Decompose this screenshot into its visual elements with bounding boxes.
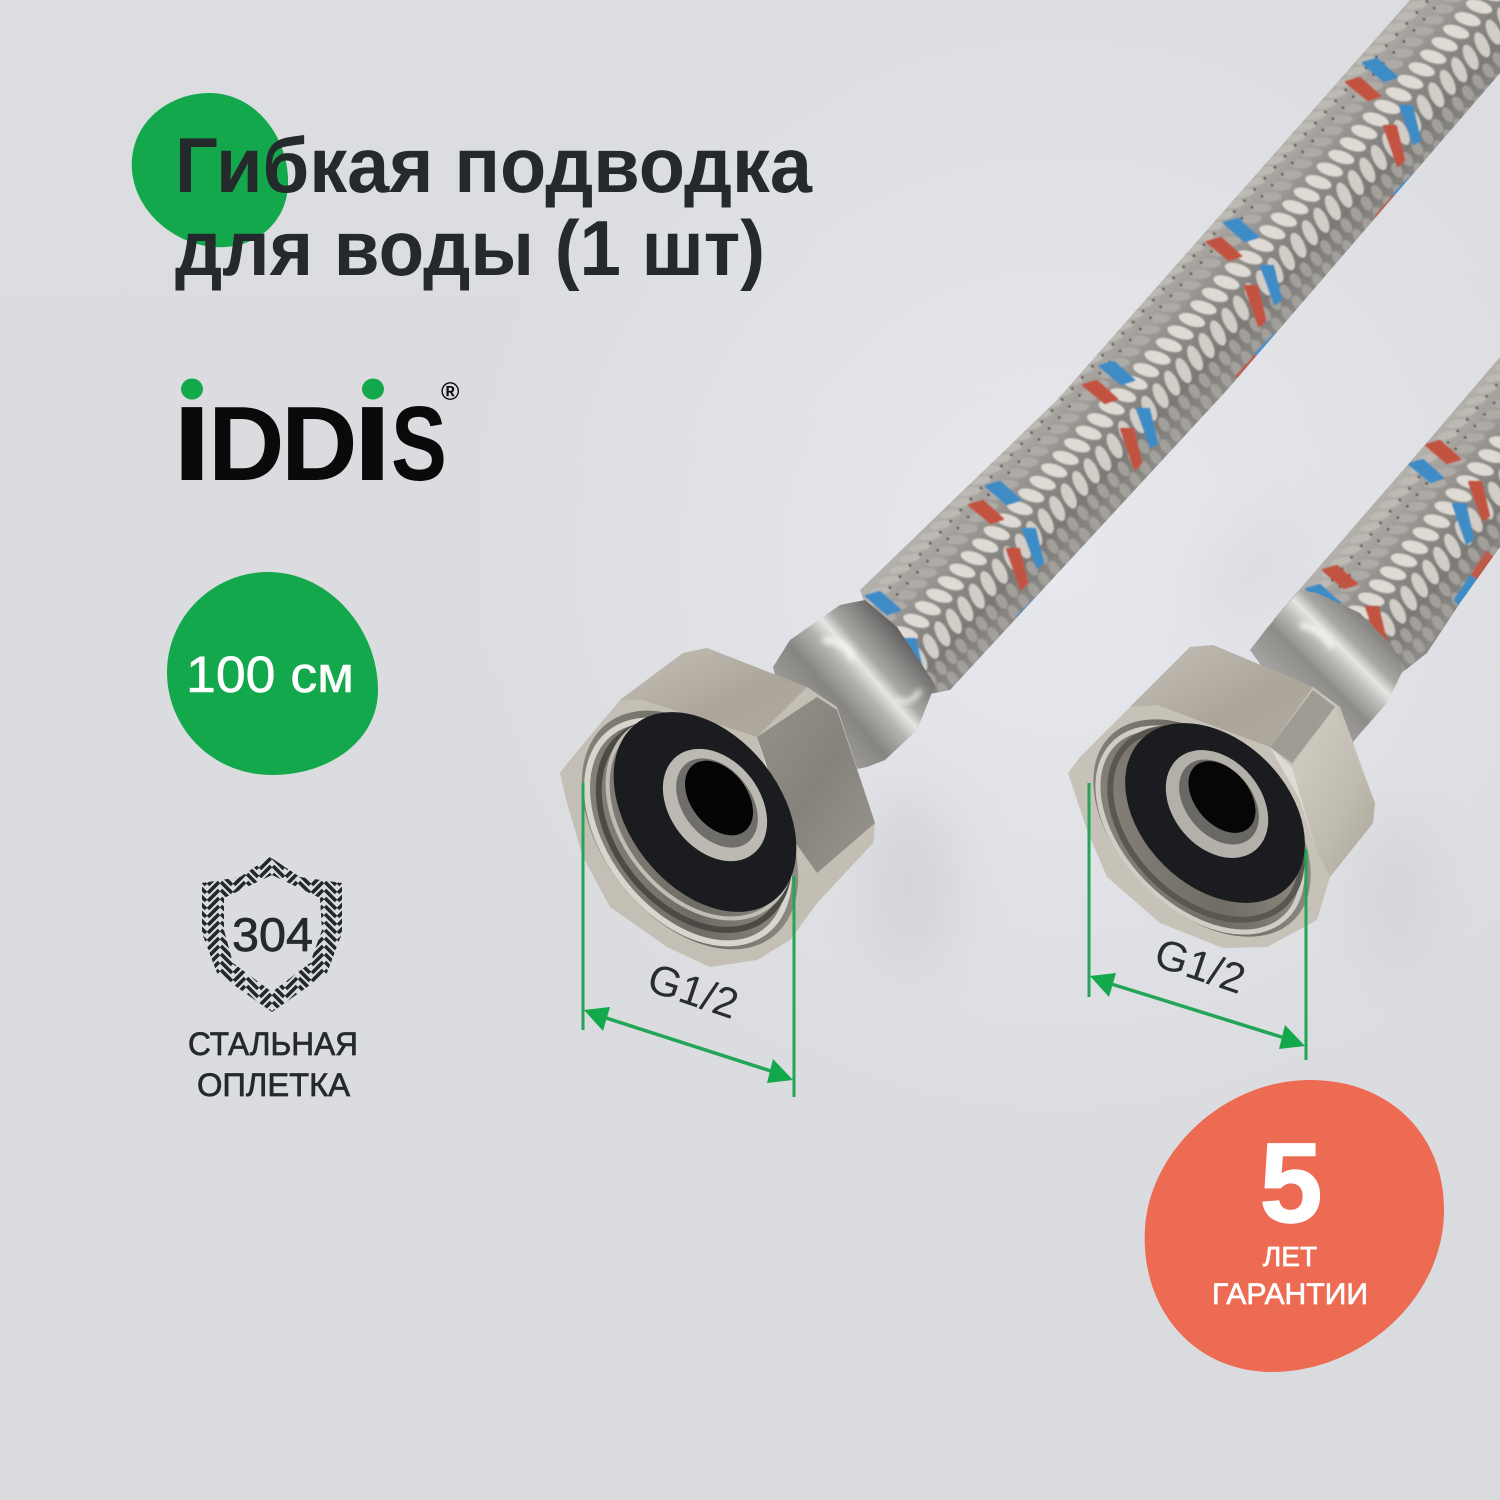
brand logo: IDDIS: I <box>172 384 212 503</box>
hose 2: braided steel hose <box>1273 357 1500 673</box>
brand logo: IDDIS: ® <box>441 378 460 406</box>
hose 1: braided steel hose <box>860 0 1500 694</box>
icon: steel 304 shield: 304 <box>232 908 313 961</box>
fitting 2: collar <box>1250 590 1403 760</box>
title: для воды (1 шт) <box>175 204 765 292</box>
badge: 5 year warranty: ЛЕТ <box>1263 1241 1317 1272</box>
icon: steel 304 shield <box>202 857 342 1012</box>
badge: 5 year warranty: ГАРАНТИИ <box>1212 1278 1368 1311</box>
dimension: left G1/2: G1/2 <box>642 954 744 1028</box>
label: steel braid <box>188 1026 358 1103</box>
label: steel braid: ОПЛЕТКА <box>197 1067 351 1103</box>
brand logo: IDDIS: DD <box>208 385 358 503</box>
brand logo: IDDIS <box>172 378 460 503</box>
decorative green blob behind title <box>132 93 288 247</box>
fitting 1: collar <box>773 600 935 780</box>
brand logo: IDDIS: I <box>352 384 392 503</box>
dimension: right G1/2: G1/2 <box>1149 929 1251 1003</box>
badge: 5 year warranty <box>1145 1080 1444 1372</box>
badge: 5 year warranty: 5 <box>1260 1120 1322 1246</box>
badge: length 100 cm <box>167 572 378 775</box>
dimension: left G1/2 <box>583 783 794 1097</box>
title <box>175 121 813 292</box>
label: steel braid: СТАЛЬНАЯ <box>188 1026 358 1062</box>
dimension: right G1/2 <box>1089 783 1306 1060</box>
badge: length 100 cm: 100 см <box>186 646 354 703</box>
brand logo: IDDIS: S <box>391 386 447 503</box>
title: Гибкая подводка <box>175 121 813 209</box>
fitting 2: hex nut <box>1068 645 1375 948</box>
fitting 1: hex nut <box>560 648 875 967</box>
